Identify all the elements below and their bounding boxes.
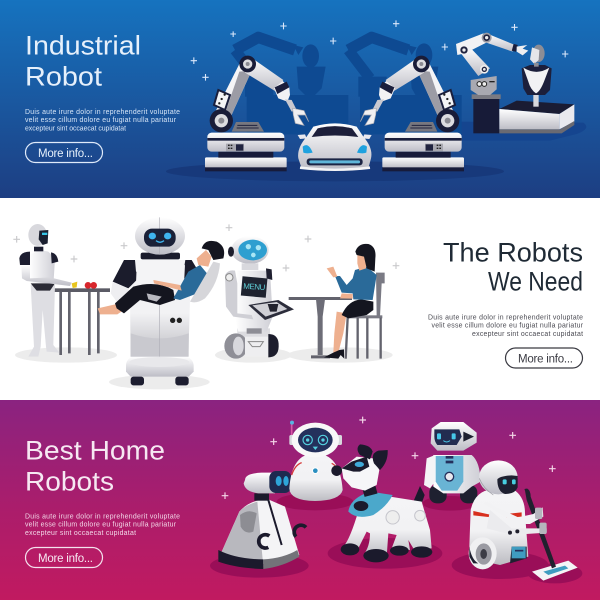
button: more info: More info...	[38, 553, 93, 565]
robot: wheeled robot	[424, 422, 481, 503]
text block: robots we need description	[428, 314, 584, 338]
panel background white	[0, 198, 600, 400]
background silhouettes of robots	[235, 37, 462, 134]
panel: the robots we need	[0, 198, 600, 400]
floor shadows	[15, 347, 393, 389]
text block: home robots description: excepteur sint occaecat cupidatat	[25, 530, 136, 537]
car	[298, 123, 372, 170]
sparkles	[191, 20, 568, 81]
text block: robots we need description: velit esse cillum dolore eu fugiat nulla pariatur	[432, 322, 584, 330]
small arm	[456, 33, 528, 95]
chef robot body	[19, 224, 72, 357]
button: more info: More info...	[518, 354, 573, 366]
button: more info	[26, 142, 102, 162]
text block: industrial description: Duis aute irure dolor in reprehenderit voluptate	[25, 109, 180, 116]
sparkles	[13, 224, 399, 271]
heading: Industrial Robot: Robot	[25, 62, 103, 92]
arm joints	[210, 56, 256, 132]
illustration: service robots	[13, 217, 399, 389]
text block: robots we need description: Duis aute irure dolor in reprehenderit voluptate	[428, 314, 583, 322]
waiter robot	[224, 236, 294, 359]
man being carried	[98, 241, 224, 314]
button: more info: More info...	[38, 148, 93, 160]
woman at table	[289, 244, 385, 359]
button: more info	[26, 548, 102, 568]
floor shadows	[166, 122, 586, 181]
sparkles	[222, 417, 556, 499]
heading: The Robots We Need	[443, 238, 583, 296]
kitchen table	[48, 282, 110, 355]
arm segments	[214, 57, 309, 125]
chef robot with table	[19, 224, 110, 357]
illustration: home robots	[210, 417, 582, 583]
pedestal	[472, 94, 501, 133]
panel: best home robots	[0, 400, 600, 600]
waiter robot: MENU	[243, 282, 266, 292]
left robot arm	[205, 56, 309, 171]
chair	[346, 273, 385, 359]
heading: The Robots We Need: The Robots	[443, 238, 583, 268]
heading: Best Home Robots	[25, 436, 165, 496]
text block: industrial description: excepteur sint occaecat cupidatat	[25, 125, 126, 132]
right robot arm (mirrored)	[360, 56, 464, 171]
robot: round-head robot	[289, 421, 343, 501]
heading: Best Home Robots: Best Home	[25, 436, 165, 466]
woman figure	[324, 244, 377, 359]
robot: dome robot	[218, 471, 306, 569]
robot bust	[522, 45, 552, 107]
panel: industrial robot	[0, 0, 600, 198]
cafe table	[289, 297, 352, 358]
text block: home robots description	[25, 514, 180, 537]
text block: home robots description: Duis aute irure dolor in reprehenderit voluptate	[25, 514, 180, 520]
floor shadows	[210, 493, 582, 583]
heading: Best Home Robots: Robots	[25, 466, 114, 496]
panel background blue	[0, 0, 600, 198]
heading: Industrial Robot: Industrial	[25, 30, 141, 60]
base of arm	[205, 122, 287, 171]
big robot body	[111, 217, 197, 385]
heading: The Robots We Need: We Need	[488, 266, 583, 296]
illustration: robot assembly line	[166, 20, 586, 181]
heading: Industrial Robot	[25, 30, 141, 92]
panel background purple	[0, 400, 600, 600]
box platform	[499, 101, 574, 133]
right side workstation	[456, 33, 574, 133]
button: more info	[506, 348, 582, 368]
text block: home robots description: velit esse cillum dolore eu fugiat nulla pariatur	[25, 522, 177, 528]
robot: dog	[331, 444, 432, 562]
text block: industrial description	[25, 109, 180, 132]
big robot carrying man	[98, 217, 224, 385]
robot: mopping robot	[469, 460, 578, 581]
text block: robots we need description: excepteur sint occaecat cupidatat	[472, 331, 583, 338]
text block: industrial description: velit esse cillum dolore eu fugiat nulla pariatur	[25, 117, 177, 124]
